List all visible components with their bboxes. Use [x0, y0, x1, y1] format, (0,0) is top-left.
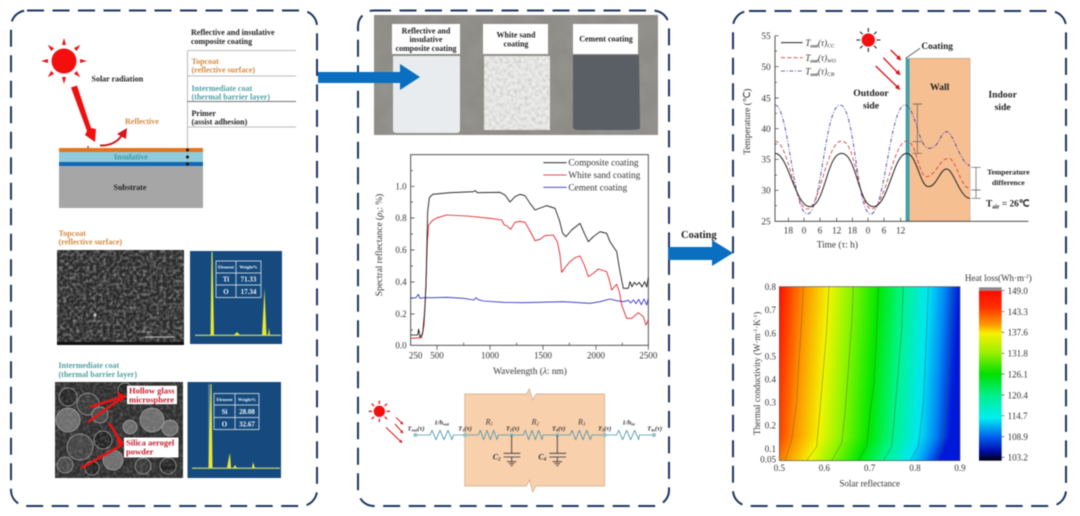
labels: T: [458, 425, 462, 432]
chart: temperature curves: 55: [761, 32, 771, 42]
image: intermediate coat SEM: Hollow glass: [129, 386, 175, 396]
chart: temperature curves: Wall: [930, 82, 950, 93]
diagram: coating layers: Substrate: [114, 183, 147, 192]
table: coating layer key: [186, 28, 296, 166]
curve: composite temperature: [775, 153, 970, 207]
panel: temperature and heat loss: [733, 11, 1066, 506]
chart: heat loss heatmap: 0.4: [765, 375, 777, 385]
legend: [781, 38, 836, 78]
label: solar radiation: Solar radiation: [92, 74, 144, 84]
chart: spectral reflectance: 1000: [481, 350, 499, 360]
labels: (τ): [558, 425, 565, 432]
colorbar: 131.8: [1008, 349, 1028, 359]
chart: temperature curves: 30: [761, 187, 771, 197]
labels: T: [598, 425, 602, 432]
colorbar: [979, 286, 1028, 463]
chart: heat loss heatmap: 0.3: [765, 398, 777, 408]
chart: spectral reflectance: 1500: [534, 350, 552, 360]
chart: heat loss heatmap: 0.1: [765, 444, 776, 454]
chart: topcoat EDS spectrum: Element: [218, 264, 234, 270]
arrow: insulative: [88, 146, 110, 160]
labels: [407, 417, 662, 462]
callout: coating: Coating: [921, 42, 953, 52]
table: coating layer key: composite coating: [191, 37, 252, 46]
photo: coating samples: Reflective and: [402, 26, 451, 36]
chart: spectral reflectance: 500: [430, 350, 444, 360]
label boxes: [392, 24, 638, 54]
curve: white sand temperature: [775, 141, 970, 209]
chart: heat loss heatmap: Thermal conductivity (W·m: [752, 334, 762, 435]
chart: temperature curves: 45: [761, 94, 771, 104]
legend: T: [805, 53, 810, 63]
arrow: blue to samples: [318, 64, 420, 90]
chart: temperature curves: Indoor: [988, 89, 1018, 100]
labels: in: [651, 427, 655, 432]
chart: spectral reflectance: Wavelength (λ: nm): [493, 366, 567, 377]
chart: temperature curves: Temperature (℃): [742, 89, 753, 155]
chart: spectral reflectance: 250: [409, 350, 423, 360]
table: coating layer key: (assist adhesion): [192, 118, 248, 126]
chart: heat loss heatmap: ·K: [752, 319, 762, 329]
chart: heat loss heatmap: 0.8: [765, 282, 777, 292]
chart: intermediate coat EDS spectrum: Si: [222, 408, 227, 416]
chart: spectral reflectance: 1.0: [395, 181, 407, 191]
legend: White sand coating: [568, 171, 641, 181]
label: reflective: Reflective: [125, 117, 159, 126]
chart: temperature curves: 40: [761, 125, 771, 135]
labels: T: [506, 425, 510, 432]
chart: spectral reflectance: 2000: [587, 350, 605, 360]
chart: temperature curves: 50: [761, 63, 771, 73]
legend: CC: [827, 44, 835, 50]
chart: spectral reflectance: [374, 155, 658, 377]
image: intermediate coat SEM: microsphere: [129, 394, 174, 404]
labels: (τ): [655, 425, 662, 432]
chart: temperature curves: side: [863, 100, 880, 111]
table: coating layer key: Intermediate coat: [192, 84, 252, 93]
labels: C: [493, 452, 498, 461]
chart: temperature curves: 6: [882, 226, 887, 236]
labels: in: [631, 422, 635, 427]
legend: (τ): [818, 38, 827, 48]
chart: intermediate coat EDS spectrum: 32.67: [239, 420, 255, 428]
image: topcoat SEM: 50 nm: [142, 329, 153, 334]
labels: 2: [497, 457, 501, 462]
chart: heat loss heatmap: 0.7: [864, 463, 876, 473]
chart: heat loss heatmap: -1: [753, 329, 759, 334]
chart: topcoat EDS spectrum: Weight%: [239, 264, 258, 270]
chart: spectral reflectance: λ: [380, 209, 386, 212]
labels: 4: [555, 427, 559, 432]
chart: spectral reflectance: : %): [374, 194, 385, 210]
heading: topcoat: (reflective surface): [58, 238, 122, 246]
diagram: coating layers: [59, 148, 203, 208]
chart: intermediate coat EDS spectrum: Weight%: [238, 397, 257, 402]
table: coating layer key: Topcoat: [192, 57, 219, 66]
chart: temperature curves: = 26℃: [1000, 199, 1029, 210]
chart: temperature curves: 12: [832, 226, 842, 236]
photo: coating samples: Cement coating: [579, 34, 633, 44]
chart: temperature curves: Temperature: [987, 167, 1030, 176]
labels: (τ): [604, 425, 611, 432]
table: coating layer key: Reflective and insulative: [191, 28, 275, 37]
labels: 1: [462, 427, 464, 432]
labels: C: [538, 452, 544, 461]
colorbar: 114.7: [1008, 411, 1028, 421]
chart: topcoat EDS spectrum: O: [223, 288, 229, 296]
chart: heat loss heatmap: 0.9: [954, 463, 966, 473]
chart: heat loss heatmap: ): [752, 312, 762, 315]
labels: out: [443, 422, 450, 427]
arrow: coating: [668, 240, 733, 266]
labels: 3: [583, 422, 586, 427]
chart: heat loss heatmap: 0.6: [765, 328, 777, 338]
chart: temperature curves: 0: [802, 226, 807, 236]
chart: topcoat EDS spectrum: Ti: [223, 276, 229, 284]
image: intermediate coat SEM: [55, 382, 183, 478]
chart: heat loss heatmap: -2: [1024, 274, 1029, 280]
heading: intermediate coat: [58, 361, 137, 379]
sample: composite coating: [393, 56, 460, 133]
curve: white sand coating: [411, 215, 648, 338]
wiring: [415, 430, 654, 440]
chart: temperature curves: T: [986, 200, 992, 210]
icon: sun small: [369, 401, 390, 422]
chart: heat loss heatmap: 0.05: [760, 454, 776, 464]
chart: temperature curves: 35: [761, 156, 771, 166]
heading: intermediate coat: (thermal barrier layer): [58, 370, 137, 379]
legend: out: [810, 59, 818, 65]
photo: coating samples: composite coating: [395, 44, 457, 53]
chart: heat loss heatmap: 0.6: [819, 463, 830, 473]
chart: heat loss heatmap: -1: [753, 315, 759, 319]
chart: spectral reflectance: 2500: [639, 350, 658, 360]
panel: coating structure and microscopy: [11, 10, 317, 506]
icon: sun: [856, 28, 880, 52]
arrow: incoming radiation: [71, 86, 96, 142]
colorbar: 137.6: [1008, 328, 1028, 338]
legend: WO: [827, 59, 836, 65]
photo: coating samples: [374, 15, 658, 135]
chart: intermediate coat EDS spectrum: 28.08: [239, 408, 255, 416]
chart: temperature curves: side: [995, 102, 1011, 113]
chart: temperature curves: difference: [992, 178, 1025, 187]
chart: temperature curves: 0: [866, 226, 871, 236]
labels: 1: [491, 422, 493, 427]
sample: white sand coating: [484, 56, 550, 130]
labels: T: [647, 425, 651, 432]
arrows: solar rays: [876, 50, 901, 90]
chart: heat loss heatmap: Heat loss(Wh·m: [965, 273, 1024, 283]
labels: T: [552, 425, 556, 432]
legend: Cement coating: [568, 183, 627, 193]
chart: heat loss heatmap: 0.5: [765, 351, 777, 361]
photo: coating samples: coating: [504, 40, 528, 48]
chart: temperature curves: 12: [896, 226, 906, 236]
colorbar: 149.0: [1008, 286, 1028, 296]
chart: temperature curves: Outdoor: [853, 88, 889, 99]
chart: topcoat EDS spectrum: [190, 251, 282, 344]
chart: intermediate coat EDS spectrum: Element: [216, 397, 233, 402]
labels: (τ): [417, 425, 425, 432]
legend: (τ): [818, 53, 827, 63]
chart: temperature curves: air: [992, 204, 1000, 210]
labels: out: [411, 427, 418, 432]
curve: composite coating: [411, 191, 648, 337]
table: coating layer key: (reflective surface): [192, 66, 255, 74]
chart: heat loss heatmap: 0.8: [909, 463, 921, 473]
legend: [543, 159, 641, 193]
colorbar: 120.4: [1008, 390, 1028, 400]
chart: heat loss heatmap: 0.7: [765, 305, 777, 315]
diagram: coating layers: Insulative: [114, 152, 148, 162]
labels: 1/h: [622, 420, 631, 427]
image: intermediate coat SEM: Silica aerogel: [126, 438, 175, 448]
labels: T: [407, 425, 411, 432]
chart: spectral reflectance: 0.6: [395, 245, 407, 255]
panel: sample tests: [358, 10, 669, 506]
colorbar: 103.2: [1008, 453, 1028, 463]
chart: heat loss heatmap: [752, 273, 1032, 488]
chart: spectral reflectance: 0.8: [395, 213, 407, 223]
colorbar: 126.1: [1008, 369, 1028, 379]
image: intermediate coat SEM: powder: [126, 446, 154, 456]
chart: temperature curves: Time (τ: h): [817, 240, 858, 251]
chart: spectral reflectance: 0.4: [395, 277, 407, 287]
chart: spectral reflectance: 0.2: [395, 309, 407, 319]
chart: intermediate coat EDS spectrum: O: [222, 420, 228, 428]
table: coating layer key: (thermal barrier layer): [192, 92, 270, 102]
colorbar: 143.3: [1008, 307, 1028, 317]
chart: heat loss heatmap: ): [1029, 273, 1032, 283]
labels: 2: [537, 422, 540, 427]
legend: CB: [827, 72, 835, 78]
labels: 3: [601, 427, 605, 432]
chart: spectral reflectance: Spectral reflectance (ρ: [375, 212, 385, 296]
labels: R: [486, 417, 491, 426]
labels: R: [578, 417, 583, 426]
sample: cement coating: [573, 55, 640, 130]
legend: out: [810, 44, 818, 50]
chart: temperature curves: [742, 28, 1030, 251]
labels: R: [532, 417, 537, 426]
colorbar: 108.9: [1008, 432, 1028, 442]
callout: coating: [906, 42, 953, 58]
image: topcoat SEM: [57, 250, 184, 345]
chart: temperature curves: 25: [761, 218, 771, 228]
labels: 1/h: [434, 420, 443, 427]
legend: T: [805, 66, 810, 76]
chart: topcoat EDS spectrum: 71.33: [241, 276, 257, 284]
legend: out: [810, 72, 818, 78]
legend: T: [805, 38, 810, 48]
icon: sun: [41, 38, 87, 84]
arrow: reflected: [100, 128, 127, 146]
curve: cement coating: [411, 294, 648, 305]
legend: Composite coating: [568, 159, 639, 169]
chart: heat loss heatmap: 0.5: [774, 463, 785, 473]
labels: 4: [543, 457, 547, 462]
heading: topcoat: Topcoat: [58, 229, 86, 238]
labels: (τ): [464, 425, 472, 432]
chart: spectral reflectance: 0.0: [395, 341, 407, 351]
chart: temperature curves: 6: [818, 226, 823, 236]
chart: intermediate coat EDS spectrum: [188, 382, 281, 478]
heading: topcoat: [58, 229, 122, 246]
legend: (τ): [818, 66, 827, 76]
labels: (τ): [512, 425, 519, 432]
chart: heat loss heatmap: 0.2: [765, 421, 776, 431]
chart: topcoat EDS spectrum: 17.34: [241, 288, 257, 296]
chart: heat loss heatmap: Solar reflectance: [839, 478, 900, 488]
capacitors: [504, 435, 566, 466]
photo: coating samples: insulative: [410, 35, 443, 44]
label: coating arrow: Coating: [681, 230, 717, 241]
chart: temperature curves: 18: [784, 226, 793, 236]
photo: coating samples: White sand: [497, 30, 536, 40]
brackets: temperature difference: [913, 104, 981, 198]
chart: temperature curves: 18: [848, 226, 857, 236]
table: coating layer key: Primer: [192, 109, 216, 118]
diagram: thermal circuit: [369, 389, 662, 492]
curve: cement coating temperature: [775, 105, 970, 214]
labels: 2: [509, 427, 513, 432]
heading: intermediate coat: Intermediate coat: [58, 361, 119, 370]
